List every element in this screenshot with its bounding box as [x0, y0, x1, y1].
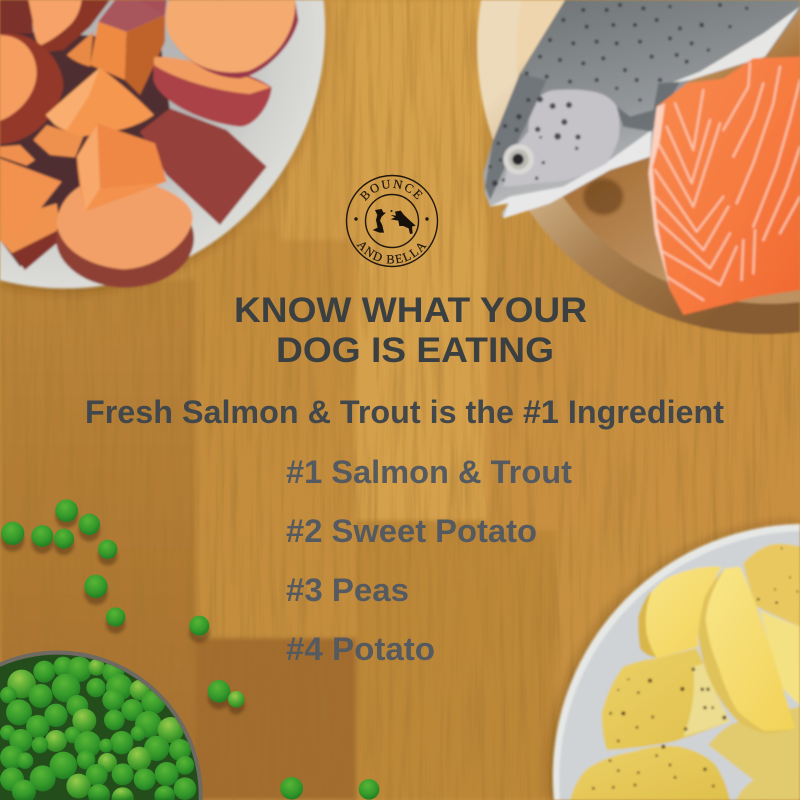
badge text top: BOUNCE: [360, 180, 423, 201]
ingredient list: #2 Sweet Potato: [286, 513, 537, 549]
white plate: [0, 0, 325, 288]
sweet potato pieces: [0, 0, 298, 287]
logo: Bounce and Bella badge: [346, 174, 438, 268]
board inner face: [516, 0, 800, 304]
photo: bowl of potatoes: [548, 522, 800, 800]
glass bowl: [0, 651, 203, 800]
peas inside bowl: [0, 657, 196, 800]
badge dots: [354, 210, 429, 221]
trout spots: [488, 3, 748, 186]
title: [234, 290, 587, 370]
potato speckles: [592, 547, 798, 790]
subtitle: Fresh Salmon & Trout is the #1 Ingredient: [85, 394, 724, 430]
ingredient list: #3 Peas: [286, 572, 409, 608]
trout body: [483, 0, 800, 218]
fat lines: [655, 63, 800, 300]
icon: two jumping dogs: [373, 209, 416, 234]
photo: scattered peas and bowl: [0, 499, 379, 800]
photo: trout and salmon fillet on board: [477, 0, 800, 334]
ingredient list: #4 Potato: [286, 631, 435, 667]
badge text bottom: AND BELLA: [356, 242, 427, 264]
potato pieces: [570, 544, 800, 800]
plate shadow: [548, 522, 800, 800]
plate shadow: [0, 0, 325, 292]
eye: [503, 144, 534, 175]
title: DOG IS EATING: [276, 330, 554, 370]
title: KNOW WHAT YOUR: [234, 290, 587, 330]
salmon fillet: [648, 57, 800, 315]
photo: bowl of sweet potatoes: [0, 0, 325, 292]
badge rings: [346, 176, 438, 266]
loose peas: [1, 499, 379, 800]
white plate: [553, 524, 800, 800]
ingredient list: [286, 454, 572, 667]
ingredient list: #1 Salmon & Trout: [286, 454, 572, 490]
round wooden board: [477, 0, 800, 334]
pea shadows: [0, 505, 245, 800]
